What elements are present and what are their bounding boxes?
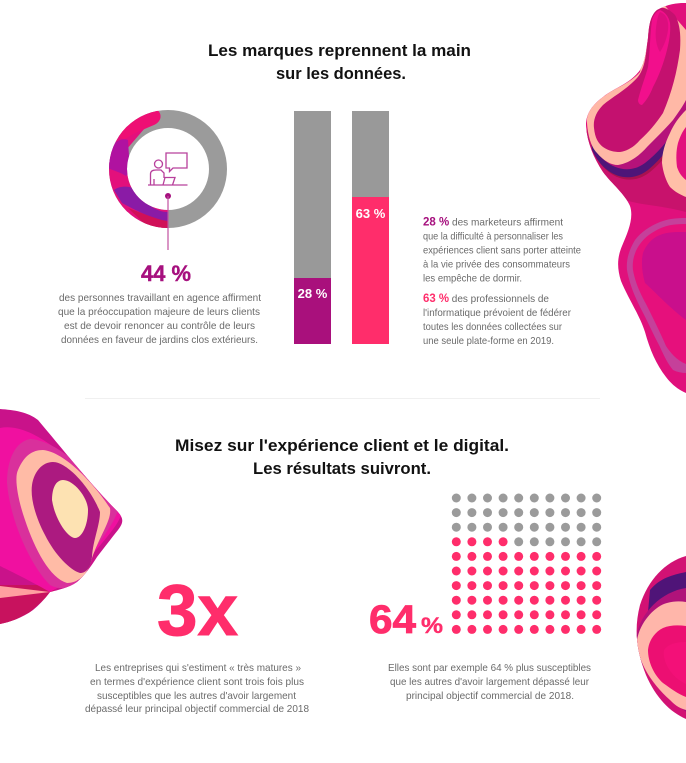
- title: section 1: [208, 41, 471, 83]
- text: 3x paragraph: susceptibles que les autres d'avoir largement: [97, 690, 296, 702]
- stat: 3x: 3x: [157, 571, 238, 651]
- blob: top right organic shape: [580, 0, 686, 400]
- text: 63 % IT professionals paragraph: l'informatique prévoient de fédérer: [423, 307, 571, 319]
- text: agency paragraph: est de devoir renoncer au contrôle de leurs: [64, 320, 255, 332]
- text: agency paragraph: que la préoccupation majeure de leurs clients: [58, 306, 260, 318]
- text: 28 % marketers paragraph: 28 % des marketeurs affirment: [423, 214, 563, 228]
- stat: 64 %: [369, 598, 443, 642]
- text: 63 % IT professionals paragraph: toutes les données collectées sur: [423, 321, 562, 333]
- icon: person at laptop with speech bubble: [148, 153, 188, 185]
- text: 63 % IT professionals paragraph: [423, 291, 571, 347]
- text: 64 % paragraph: Elles sont par exemple 64 % plus susceptibles: [388, 662, 591, 674]
- text: agency paragraph: des personnes travaillant en agence affirment: [59, 292, 261, 304]
- text: 63 % IT professionals paragraph: une seule plate-forme en 2019.: [423, 335, 554, 347]
- connector: dot and line: [165, 193, 171, 250]
- title: section 2: [175, 436, 509, 478]
- text: 3x paragraph: dépassé leur principal objectif commercial de 2018: [85, 703, 309, 715]
- text: 28 % marketers paragraph: expériences client sans porter atteinte: [423, 244, 581, 256]
- text: 3x paragraph: Les entreprises qui s'estiment « très matures »: [95, 662, 301, 674]
- text: 28 % marketers paragraph: [423, 214, 581, 284]
- text: 64 % paragraph: principal objectif commercial de 2018.: [406, 690, 574, 702]
- text: agency paragraph: [58, 292, 261, 346]
- blob: right bottom organic shape: [636, 556, 686, 719]
- text: 28 % marketers paragraph: les empêche de dormir.: [423, 272, 522, 284]
- text: 28 % marketers paragraph: que la difficulté à personnaliser les: [423, 230, 563, 242]
- title: section 2: Les résultats suivront.: [253, 459, 431, 478]
- title: section 1: Les marques reprennent la main: [208, 41, 471, 60]
- donut chart: 44 %: [105, 108, 218, 229]
- text: 3x paragraph: [85, 662, 309, 715]
- bar chart: 63 %: [352, 111, 389, 344]
- blob: left organic shape: [0, 409, 122, 624]
- text: 64 % paragraph: [388, 662, 591, 702]
- stat: 64 %: 64: [369, 598, 417, 642]
- text: 64 % paragraph: que les autres d'avoir largement dépassé leur: [390, 676, 589, 688]
- dot matrix: 64 of 100: [452, 494, 601, 634]
- text: 3x paragraph: en termes d'expérience client sont trois fois plus: [90, 676, 304, 688]
- stat: 44 %: 44 %: [141, 261, 191, 286]
- text: 63 % IT professionals paragraph: 63 % des professionnels de: [423, 291, 549, 305]
- title: section 1: sur les données.: [276, 64, 406, 83]
- stat: 64 %: %: [421, 613, 443, 638]
- title: section 2: Misez sur l'expérience client et le digital.: [175, 436, 509, 455]
- bar chart: 63 %: 63 %: [356, 206, 386, 221]
- bar chart: 28 %: 28 %: [298, 286, 328, 301]
- bar chart: 28 %: [294, 111, 331, 344]
- text: agency paragraph: données en faveur de jardins clos extérieurs.: [61, 334, 258, 346]
- text: 28 % marketers paragraph: à la vie privée des consommateurs: [423, 258, 570, 270]
